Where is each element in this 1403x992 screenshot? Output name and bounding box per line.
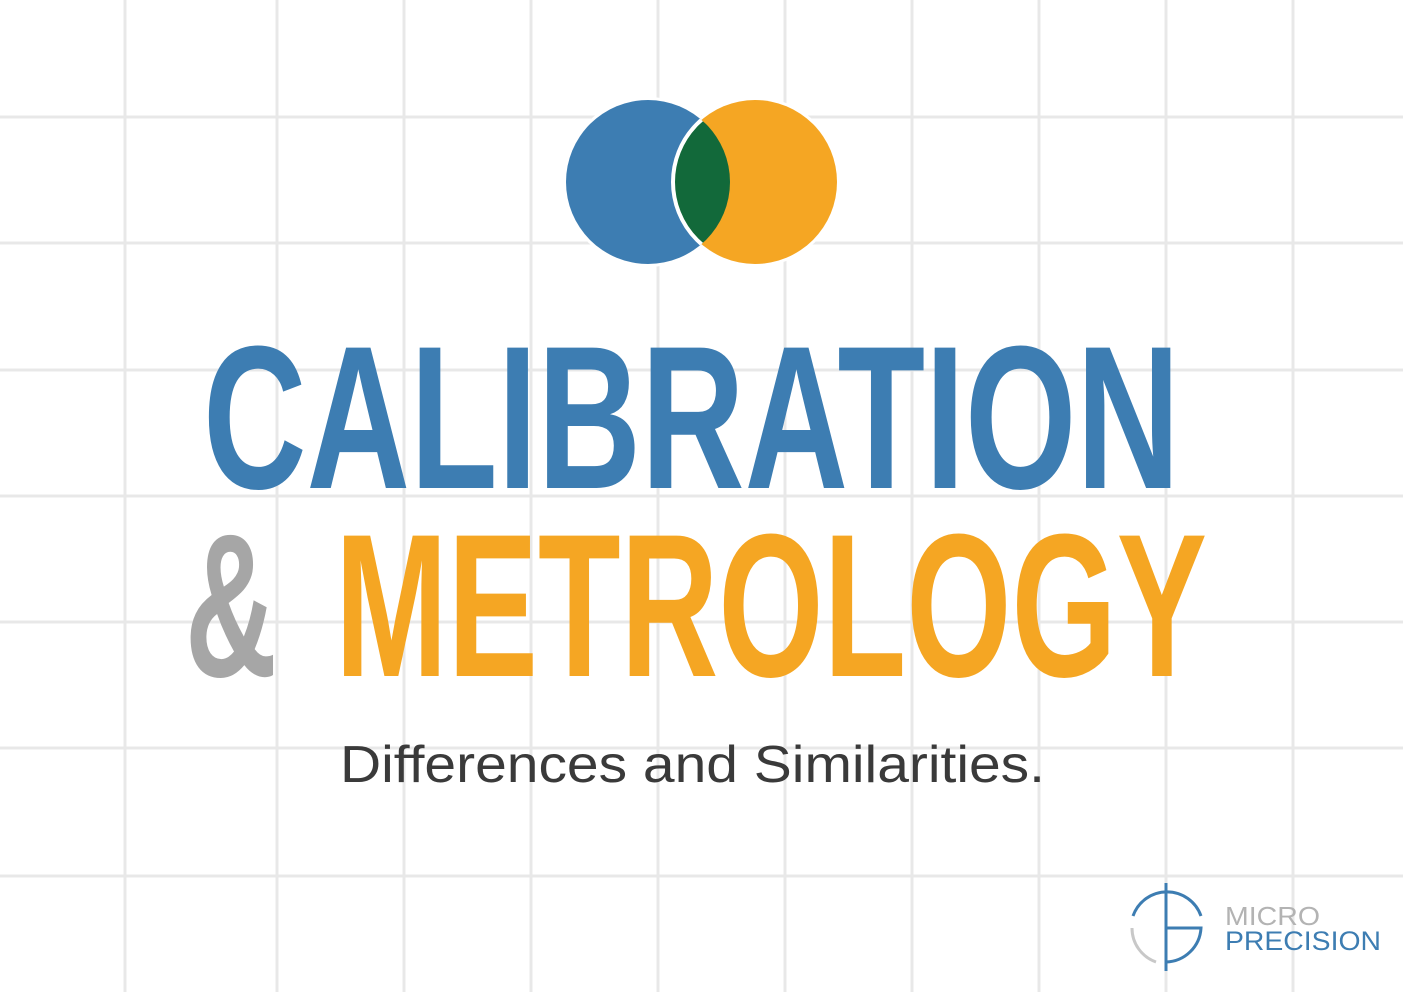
icon: venn diagram: [563, 97, 840, 267]
logo: Micro Precision: MICRO: [1225, 901, 1320, 931]
logo: Micro Precision: [1132, 883, 1381, 971]
logo: Micro Precision: PRECISION: [1225, 926, 1381, 956]
ampersand: &: [185, 492, 277, 720]
subtitle: Differences and Similarities.: [340, 736, 1045, 794]
